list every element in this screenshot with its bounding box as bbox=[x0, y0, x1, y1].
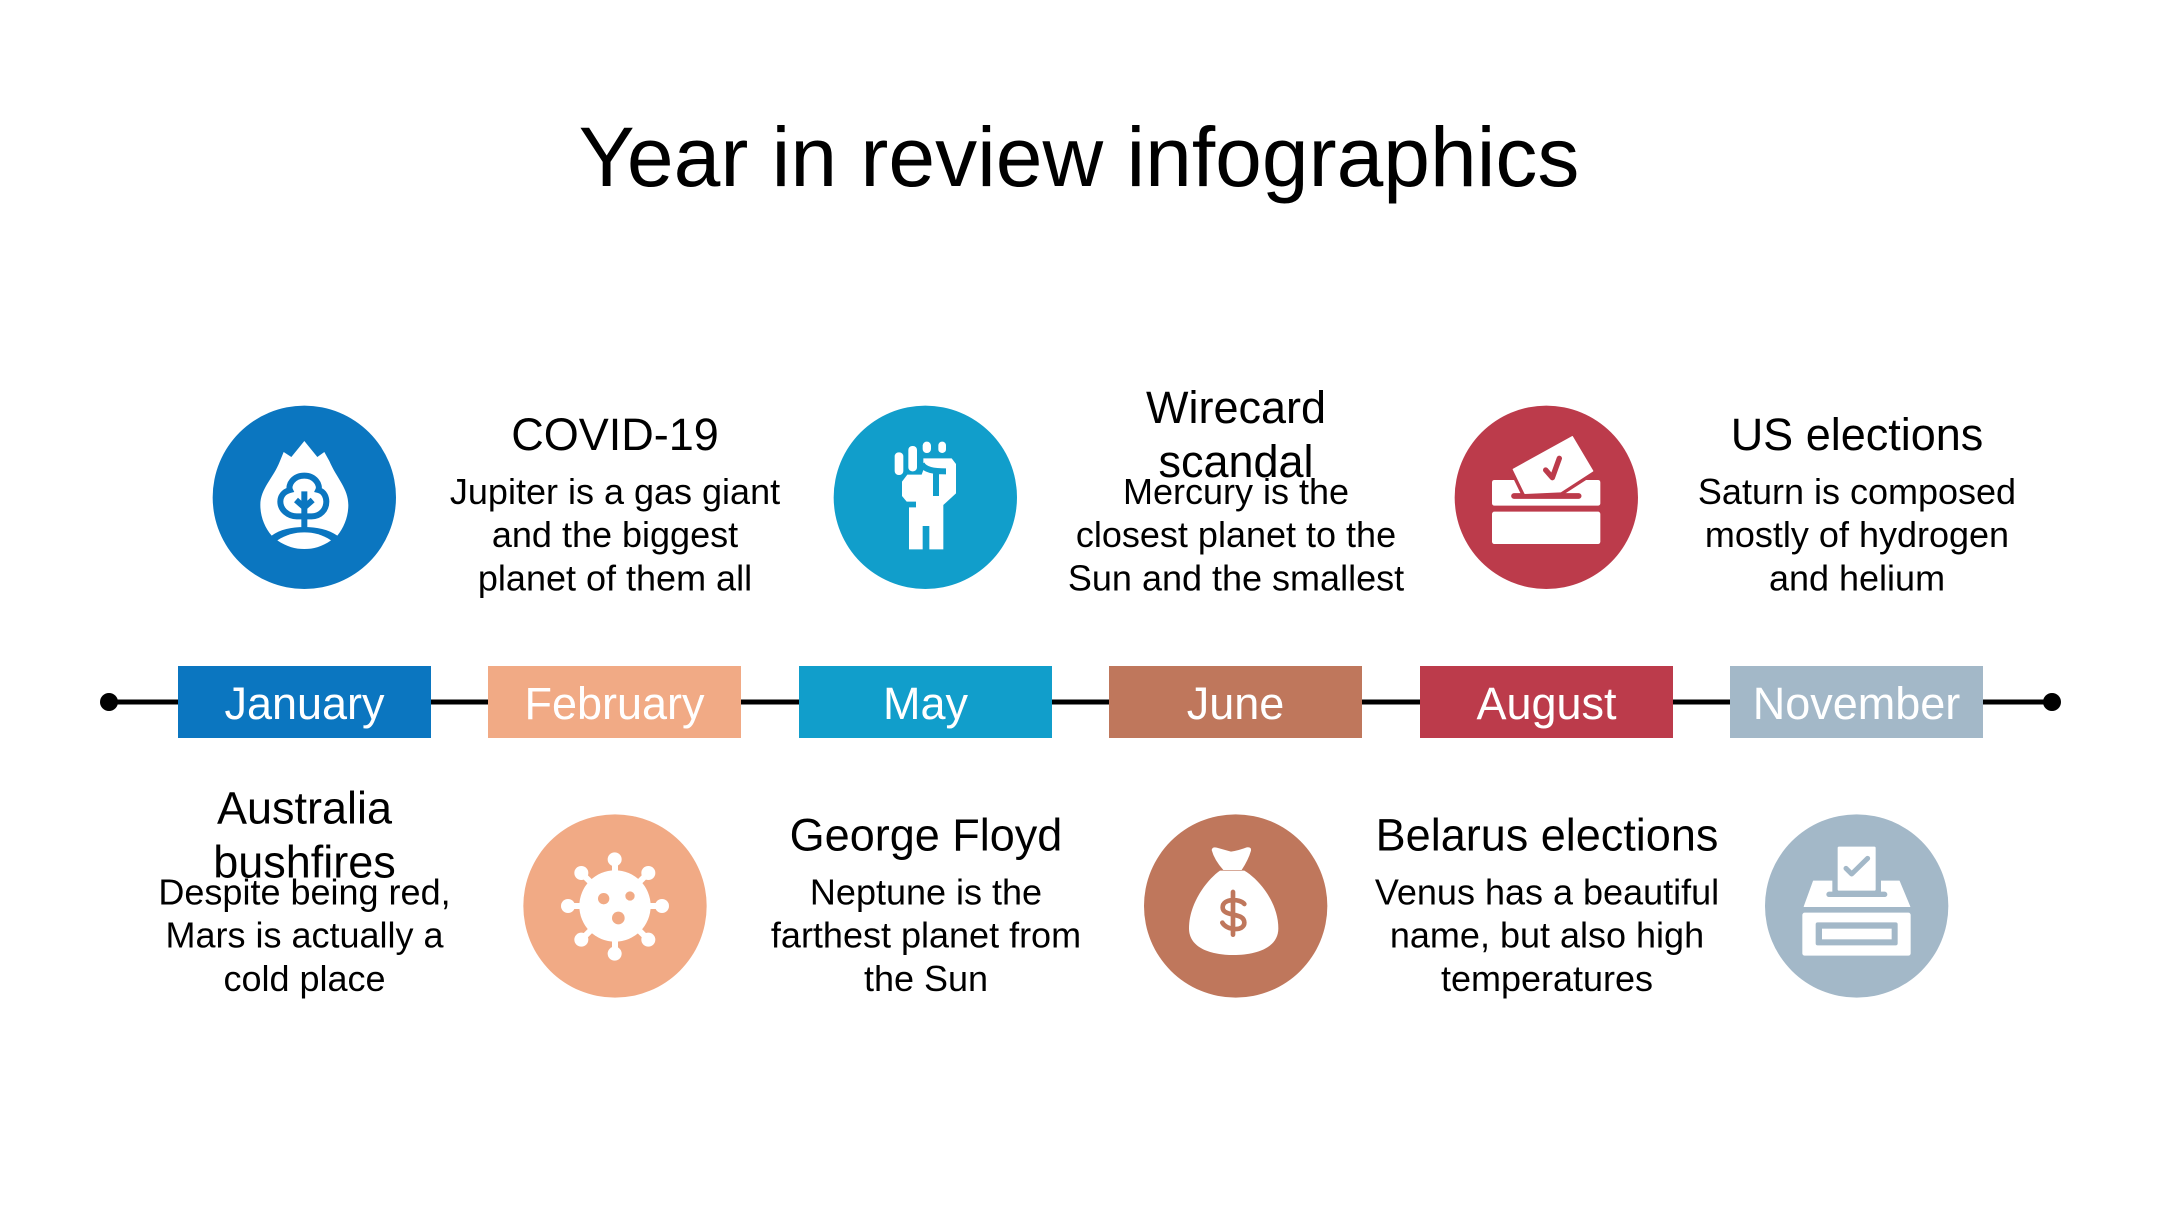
title: Year in review infographics bbox=[579, 110, 1579, 204]
month: February bbox=[488, 666, 741, 738]
event: Australia bushfires: Despite being red, bbox=[158, 872, 451, 912]
event: Belarus elections: name, but also high bbox=[1390, 914, 1704, 956]
event: Belarus elections: Belarus elections bbox=[1376, 810, 1718, 860]
event: George Floyd bbox=[771, 810, 1081, 999]
icon: ballot box bbox=[1765, 814, 1948, 998]
event: COVID-19: planet of them all bbox=[478, 558, 752, 598]
event: COVID-19 bbox=[450, 409, 780, 598]
month: June: June bbox=[1187, 678, 1284, 729]
event: US elections: mostly of hydrogen bbox=[1705, 514, 2009, 555]
event: COVID-19: and the biggest bbox=[492, 514, 738, 555]
event: George Floyd: the Sun bbox=[864, 958, 988, 999]
event: Australia bushfires bbox=[158, 782, 451, 999]
event: Wirecard scandal: Sun and the smallest bbox=[1068, 558, 1404, 598]
month: June bbox=[1109, 666, 1362, 738]
month: May bbox=[799, 666, 1052, 738]
icon: burning tree bbox=[213, 406, 396, 589]
event: COVID-19: COVID-19 bbox=[511, 409, 719, 460]
event: Wirecard scandal bbox=[1068, 382, 1404, 598]
icon: ballot into box bbox=[1455, 406, 1638, 589]
month: May: May bbox=[883, 678, 969, 729]
event: George Floyd: farthest planet from bbox=[771, 914, 1081, 956]
month: November: November bbox=[1753, 678, 1960, 729]
event: Wirecard scandal: scandal bbox=[1158, 436, 1314, 487]
event: US elections bbox=[1698, 409, 2016, 598]
event: George Floyd: Neptune is the bbox=[810, 872, 1042, 912]
event: George Floyd: George Floyd bbox=[790, 810, 1062, 860]
timeline axis bbox=[100, 693, 2061, 711]
icon: raised fist bbox=[834, 406, 1017, 589]
event: Wirecard scandal: Mercury is the bbox=[1123, 471, 1349, 512]
event: Australia bushfires: Australia bbox=[217, 782, 393, 834]
event: Belarus elections: temperatures bbox=[1441, 958, 1653, 999]
month: August bbox=[1420, 666, 1673, 738]
month: January: January bbox=[224, 678, 385, 729]
icon: money bag bbox=[1144, 814, 1327, 998]
event: Australia bushfires: Mars is actually a bbox=[165, 914, 445, 956]
month: November bbox=[1730, 666, 1983, 738]
event: Belarus elections: Venus has a beautiful bbox=[1375, 872, 1719, 912]
event: US elections: and helium bbox=[1769, 558, 1945, 598]
event: Belarus elections bbox=[1375, 810, 1719, 999]
month: August: August bbox=[1476, 678, 1617, 729]
event: Australia bushfires: bushfires bbox=[213, 836, 396, 888]
month: January bbox=[178, 666, 431, 738]
event: US elections: Saturn is composed bbox=[1698, 471, 2016, 512]
event: Australia bushfires: cold place bbox=[223, 958, 386, 999]
event: COVID-19: Jupiter is a gas giant bbox=[450, 471, 780, 512]
icon: virus bbox=[523, 814, 707, 998]
event: Wirecard scandal: Wirecard bbox=[1146, 382, 1326, 433]
event: US elections: US elections bbox=[1731, 409, 1983, 460]
event: Wirecard scandal: closest planet to the bbox=[1076, 514, 1396, 555]
month: February: February bbox=[524, 678, 705, 729]
